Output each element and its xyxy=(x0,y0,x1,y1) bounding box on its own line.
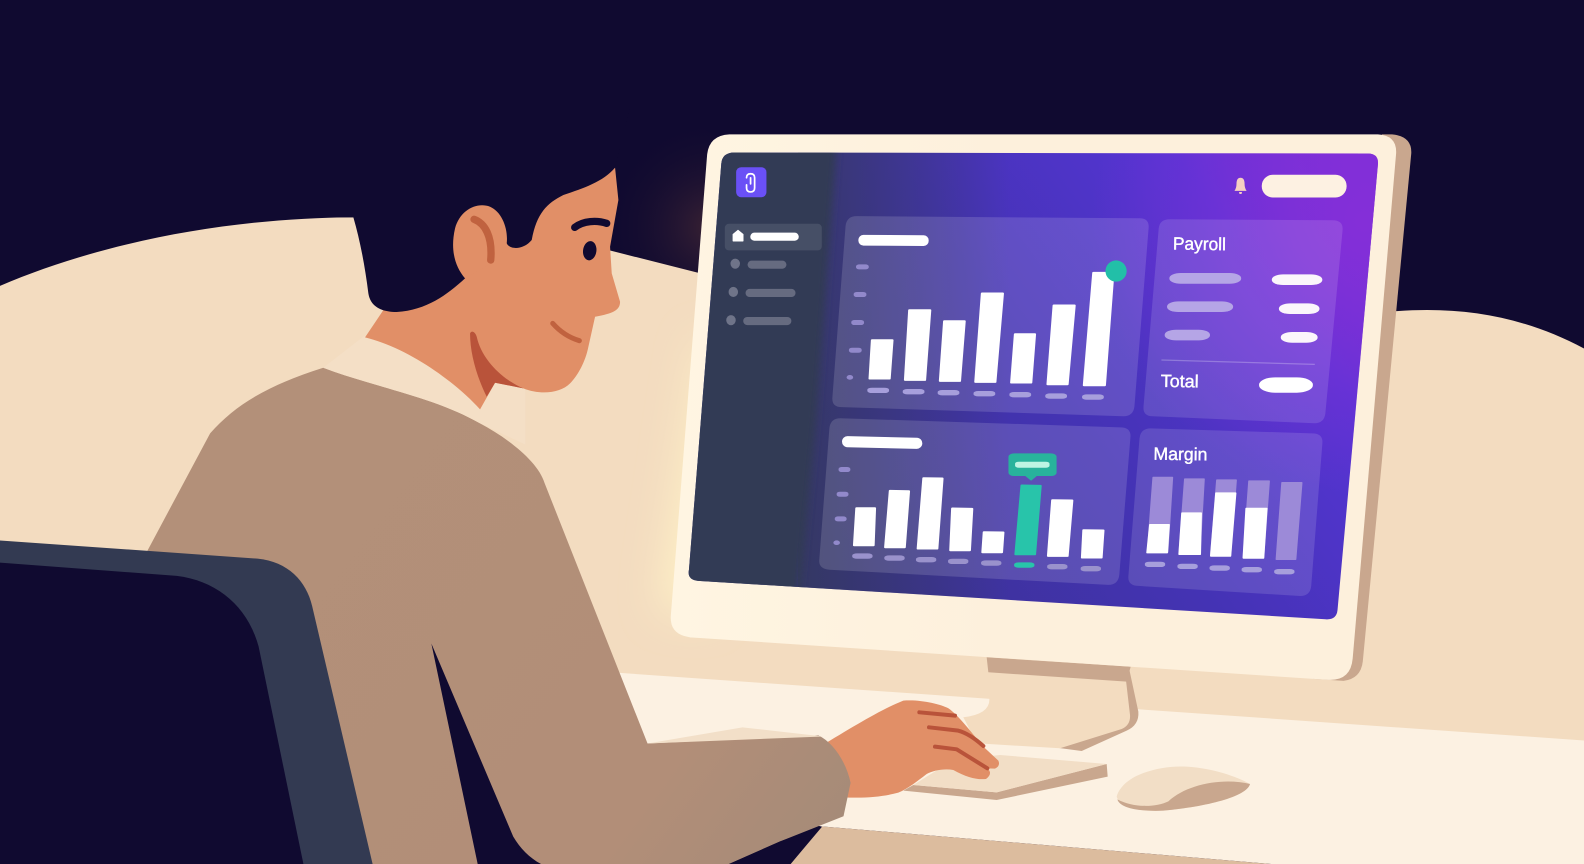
tooltip xyxy=(1008,453,1057,481)
nav menu xyxy=(725,224,822,325)
bars xyxy=(854,478,1103,558)
monitor xyxy=(667,131,1411,751)
screen xyxy=(688,152,1378,620)
keyboard and mouse xyxy=(903,755,1250,811)
y axis ticks xyxy=(833,467,850,545)
notification bell xyxy=(1234,178,1247,194)
x axis labels xyxy=(852,553,1101,571)
head xyxy=(337,93,633,409)
desk shadow by sleeve xyxy=(648,727,823,744)
hand xyxy=(820,700,999,798)
desk xyxy=(618,673,1584,864)
logo xyxy=(736,167,766,197)
y axis ticks xyxy=(847,264,869,380)
inner ear xyxy=(474,219,491,260)
person xyxy=(147,93,851,864)
x axis labels xyxy=(1145,562,1294,574)
shirt collar xyxy=(323,333,525,444)
chair frame xyxy=(0,540,373,864)
ear xyxy=(453,205,507,278)
total label: Total xyxy=(1161,371,1199,391)
panel: margin xyxy=(1128,428,1322,596)
office chair xyxy=(0,540,373,864)
sidebar xyxy=(688,152,840,588)
margin title: Margin xyxy=(1153,444,1208,464)
eyebrow xyxy=(575,221,607,227)
neck shadow xyxy=(470,332,523,397)
bars xyxy=(870,273,1113,385)
eye xyxy=(582,240,598,261)
finger lines xyxy=(919,712,987,768)
chair back xyxy=(0,563,304,864)
chart title bar xyxy=(842,436,922,449)
monitor glow on wall xyxy=(662,343,727,616)
x axis labels xyxy=(867,388,1104,400)
stacked bar tracks xyxy=(1148,477,1302,559)
hair xyxy=(337,93,633,312)
gap under arm xyxy=(431,644,542,864)
active nav item xyxy=(725,224,822,250)
sweater xyxy=(147,368,851,864)
monitor side xyxy=(1313,134,1411,681)
monitor light on dark wall xyxy=(610,99,719,278)
mouse xyxy=(1117,766,1250,811)
profile pill xyxy=(1262,175,1347,197)
white bar segments xyxy=(1147,493,1267,558)
keyboard xyxy=(903,755,1108,800)
panel: payroll xyxy=(1143,219,1343,423)
smile xyxy=(553,323,579,341)
chart title bar xyxy=(858,235,929,246)
total value xyxy=(1259,377,1313,393)
desk front edge xyxy=(790,826,1280,864)
highlighted teal bar xyxy=(1016,485,1041,554)
desk top xyxy=(618,673,1584,864)
highlight dot xyxy=(1105,260,1127,282)
payroll rows xyxy=(1165,273,1241,340)
monitor bezel xyxy=(671,134,1396,680)
panel: top chart xyxy=(832,216,1149,416)
panel: bottom chart xyxy=(819,418,1131,585)
monitor stand xyxy=(963,657,1138,751)
gap below sleeve xyxy=(727,826,822,864)
payroll title: Payroll xyxy=(1173,234,1226,254)
back wall xyxy=(0,217,1584,753)
neck and face xyxy=(365,168,620,409)
